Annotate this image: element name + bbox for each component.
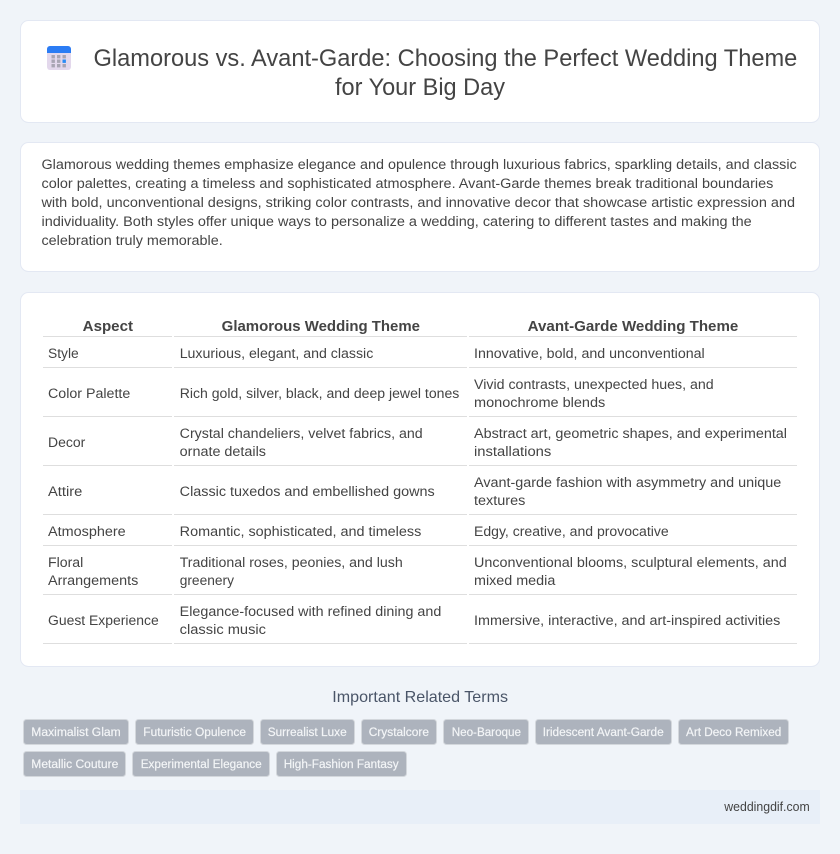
title	[94, 45, 797, 101]
tag: Futuristic Opulence	[136, 720, 254, 744]
text block: introduction paragraph: individuality. Both styles offer unique ways to personalize a wedding, catering to different tastes and making the	[42, 214, 752, 230]
heading: important related terms: Important Related Terms	[332, 689, 508, 706]
table header row	[83, 319, 738, 335]
table row: style: Innovative, bold, and unconventional	[474, 346, 705, 362]
tag: Neo-Baroque: Neo-Baroque	[452, 725, 521, 739]
table row: attire: textures	[474, 493, 525, 509]
table row: floral arrangements: Floral	[48, 555, 83, 571]
table row: atmosphere: Edgy, creative, and provocative	[474, 524, 669, 540]
table row: decor: installations	[474, 444, 551, 460]
table row: decor	[48, 426, 787, 460]
table row: attire	[48, 475, 781, 509]
tag: High-Fashion Fantasy: High-Fashion Fantasy	[284, 757, 400, 771]
text block: introduction paragraph: with bold, unconventional designs, striking color contrasts, and innovative decor that showcase artistic expression and	[40, 195, 795, 211]
footer text: source: weddingdif.com	[723, 800, 810, 814]
tag: Metallic Couture: Metallic Couture	[31, 757, 119, 771]
table row: decor: Abstract art, geometric shapes, and experimental	[474, 426, 787, 442]
text block: introduction paragraph: celebration truly memorable.	[42, 233, 223, 249]
tag: Surrealist Luxe: Surrealist Luxe	[268, 725, 347, 739]
tag: Crystalcore	[362, 720, 436, 744]
table row: guest experience: Guest Experience	[48, 613, 159, 629]
tag: Surrealist Luxe	[260, 720, 354, 744]
title: Glamorous vs. Avant-Garde: Choosing the Perfect Wedding Theme	[94, 45, 797, 72]
title: for Your Big Day	[335, 74, 505, 101]
table row: floral arrangements	[48, 555, 787, 589]
table row: decor: ornate details	[180, 444, 266, 460]
tag: Iridescent Avant-Garde	[536, 720, 672, 744]
tag: Crystalcore: Crystalcore	[369, 725, 429, 739]
tag: Futuristic Opulence: Futuristic Opulence	[143, 725, 246, 739]
text block: introduction paragraph	[40, 157, 797, 249]
panel: comparison table	[20, 292, 820, 666]
table header row: Aspect	[83, 319, 133, 335]
tag: Neo-Baroque	[444, 720, 528, 744]
table row: color palette: monochrome blends	[474, 395, 605, 411]
tag: Iridescent Avant-Garde: Iridescent Avant-Garde	[543, 725, 664, 739]
table row: style: Luxurious, elegant, and classic	[180, 346, 373, 362]
tag: Art Deco Remixed	[678, 720, 788, 744]
table row: decor: Crystal chandeliers, velvet fabrics, and	[180, 426, 423, 442]
icon: calendar	[47, 46, 71, 70]
related term tags	[24, 720, 788, 776]
footer bar	[20, 790, 820, 824]
table row: attire: Avant-garde fashion with asymmetry and unique	[474, 475, 781, 491]
table row: color palette	[48, 377, 714, 411]
table row: color palette: Rich gold, silver, black, and deep jewel tones	[180, 386, 459, 402]
tag: Art Deco Remixed: Art Deco Remixed	[686, 725, 781, 739]
table row: style	[48, 346, 705, 362]
tag: Experimental Elegance	[132, 752, 270, 776]
tag: Experimental Elegance: Experimental Elegance	[141, 757, 262, 771]
table row: attire: Attire	[48, 484, 82, 500]
table row: guest experience: Immersive, interactive, and art-inspired activities	[474, 613, 780, 629]
panel: header	[20, 20, 820, 122]
table row: attire: Classic tuxedos and embellished gowns	[180, 484, 435, 500]
table row: atmosphere: Atmosphere	[48, 524, 126, 540]
table header row: Avant-Garde Wedding Theme	[528, 319, 738, 335]
table row: color palette: Color Palette	[48, 386, 130, 402]
table row: floral arrangements: Arrangements	[48, 573, 138, 589]
table row: style: Style	[48, 346, 79, 362]
table row: atmosphere: Romantic, sophisticated, and timeless	[180, 524, 421, 540]
table row: decor: Decor	[48, 435, 86, 451]
table row: floral arrangements: greenery	[180, 573, 235, 589]
text block: introduction paragraph: Glamorous wedding themes emphasize elegance and opulence through luxurious fabrics, sparkling details, and classic	[42, 157, 797, 173]
table row: floral arrangements: mixed media	[474, 573, 555, 589]
table row: color palette: Vivid contrasts, unexpected hues, and	[474, 377, 714, 393]
tag: Maximalist Glam	[24, 720, 128, 744]
panel: introduction	[20, 142, 820, 272]
tag: Metallic Couture	[24, 752, 126, 776]
table row: floral arrangements: Unconventional blooms, sculptural elements, and	[474, 555, 787, 571]
table row: guest experience	[48, 604, 780, 638]
table row: guest experience: classic music	[180, 622, 266, 638]
tag: Maximalist Glam: Maximalist Glam	[31, 725, 121, 739]
table row: floral arrangements: Traditional roses, peonies, and lush	[180, 555, 403, 571]
tag: High-Fashion Fantasy	[276, 752, 406, 776]
text block: introduction paragraph: color palettes, creating a timeless and sophisticated atmosphere. Avant-Garde themes break traditional boundaries	[42, 176, 773, 192]
table row: atmosphere	[48, 524, 669, 540]
table header row: Glamorous Wedding Theme	[222, 319, 420, 335]
table row: guest experience: Elegance-focused with refined dining and	[180, 604, 441, 620]
